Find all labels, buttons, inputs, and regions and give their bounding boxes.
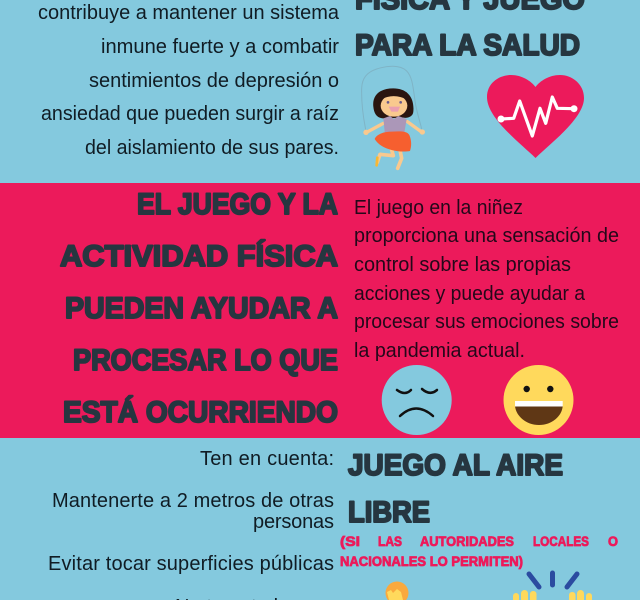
text block: immune system benefits: inmune fuerte y a combatir xyxy=(101,36,339,58)
heading: physical activity and health xyxy=(355,0,585,62)
heading: outdoor play: LIBRE xyxy=(348,496,430,529)
icon: happy face xyxy=(504,365,574,435)
text block: immune system benefits: contribuye a mantener un sistema xyxy=(38,2,340,24)
panel: pink band xyxy=(0,183,640,438)
text block: sense of control: procesar sus emociones sobre xyxy=(354,311,619,333)
text block: sense of control: la pandemia actual. xyxy=(354,340,525,362)
text block: sense of control: acciones y puede ayudar a xyxy=(354,283,586,305)
heading: play helps process events: ACTIVIDAD FÍSICA xyxy=(60,239,338,273)
icon: raised hands with burst xyxy=(513,573,592,600)
text block: local authorities note: LOCALES xyxy=(533,533,589,549)
text block: local authorities note: O xyxy=(608,533,618,549)
icon: sad face xyxy=(382,365,452,435)
heading: play helps process events: PUEDEN AYUDAR A xyxy=(65,292,338,325)
text block: sense of control: proporciona una sensación de xyxy=(354,225,619,247)
heading: outdoor play xyxy=(348,449,563,529)
text block: things to keep in mind: personas xyxy=(253,511,334,533)
panel: bottom blue band xyxy=(0,438,640,600)
heading: play helps process events: PROCESAR LO QUE xyxy=(73,344,338,377)
icon: child head xyxy=(386,582,408,600)
text block: sense of control: El juego en la niñez xyxy=(354,197,523,219)
heading: physical activity and health: PARA LA SALUD xyxy=(355,29,580,62)
text block: sense of control xyxy=(354,197,619,362)
text block: immune system benefits xyxy=(38,2,340,159)
text block: sense of control: control sobre las propias xyxy=(354,254,571,276)
text block: things to keep in mind: Mantenerte a 2 metros de otras xyxy=(52,490,334,512)
text block: things to keep in mind: Ten en cuenta: xyxy=(200,448,334,470)
icon: girl jumping rope xyxy=(362,66,425,168)
text block: local authorities note: (SI xyxy=(340,533,360,549)
text block: things to keep in mind: Evitar tocar superficies públicas xyxy=(48,553,334,575)
icon: heart with pulse line xyxy=(487,75,584,158)
heading: play helps process events xyxy=(60,188,338,429)
heading: play helps process events: EL JUEGO Y LA xyxy=(137,188,338,221)
text block: immune system benefits: ansiedad que pueden surgir a raíz xyxy=(41,103,339,125)
text block: immune system benefits: del aislamiento de sus pares. xyxy=(85,137,339,159)
text block: local authorities note: LAS xyxy=(378,533,402,549)
panel: top blue band xyxy=(0,0,640,183)
heading: outdoor play: JUEGO AL AIRE xyxy=(348,449,563,482)
heading: play helps process events: ESTÁ OCURRIENDO xyxy=(63,395,338,429)
text block: immune system benefits: sentimientos de depresión o xyxy=(89,70,339,92)
text block: local authorities note: AUTORIDADES xyxy=(420,533,514,549)
text block: local authorities note: NACIONALES LO PERMITEN) xyxy=(340,553,523,569)
text block: local authorities note xyxy=(340,533,618,569)
text block: things to keep in mind xyxy=(48,448,335,600)
